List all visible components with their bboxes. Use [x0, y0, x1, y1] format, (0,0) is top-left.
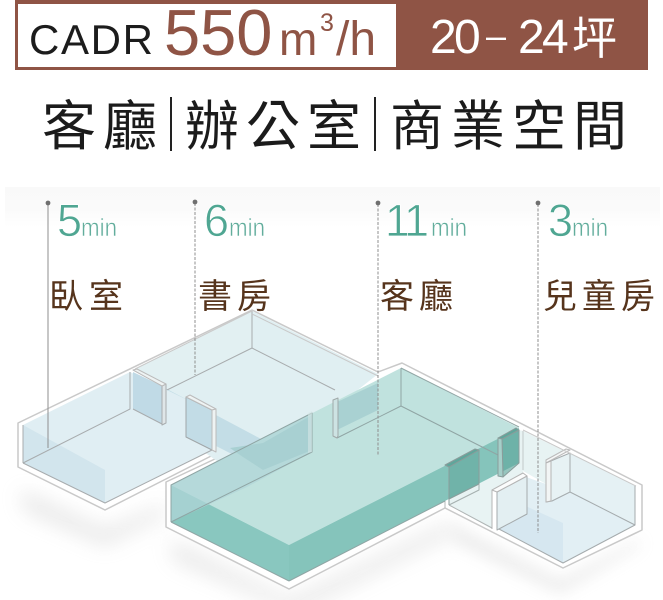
label: children's room: 兒童房 [543, 278, 655, 316]
CADR unit: 3 [320, 9, 334, 37]
CADR unit: /h [336, 13, 376, 66]
label: living room: 1 [404, 195, 429, 246]
label: bedroom [46, 195, 123, 448]
label: children's room [536, 195, 655, 533]
label: study: min [229, 214, 265, 242]
area range: 坪 [572, 13, 617, 64]
label: living room [376, 195, 467, 455]
room: study [135, 311, 378, 470]
area range: 24 [518, 11, 569, 64]
header bar: CADR rating and area [15, 0, 648, 70]
room: living room water volume [171, 368, 519, 581]
title: suitable spaces: 客廳 [42, 97, 157, 157]
area range: 20 [430, 11, 481, 64]
label: children's room: min [572, 214, 608, 242]
label: living room: 客廳 [380, 278, 453, 316]
label: living room: 1 [385, 195, 410, 246]
label: bedroom: 臥室 [49, 278, 123, 316]
label: study [193, 195, 271, 375]
label: bedroom: 5 [57, 195, 82, 246]
label: study: 書房 [198, 278, 271, 316]
isometric floor plan [18, 310, 642, 589]
title: suitable spaces [42, 97, 627, 157]
top tint band [5, 187, 660, 227]
label: living room: min [431, 214, 467, 242]
CADR unit: m [279, 13, 317, 65]
CADR label: CADR [29, 16, 153, 63]
room: bedroom [23, 369, 216, 503]
area range [430, 11, 617, 64]
label: study: 6 [204, 195, 229, 246]
label: children's room: 3 [548, 195, 573, 246]
outer wall outline [18, 310, 642, 589]
room: utility corner floor [445, 430, 566, 529]
label: bedroom: min [81, 214, 117, 242]
title: suitable spaces: 辦公室 [185, 97, 361, 157]
room: children's room [492, 430, 636, 563]
floor plan shadows [20, 490, 640, 600]
CADR unit [279, 9, 376, 66]
area range: – [486, 15, 506, 56]
title: suitable spaces: 商業空間 [390, 97, 627, 157]
partitions at living room edge [445, 428, 519, 505]
